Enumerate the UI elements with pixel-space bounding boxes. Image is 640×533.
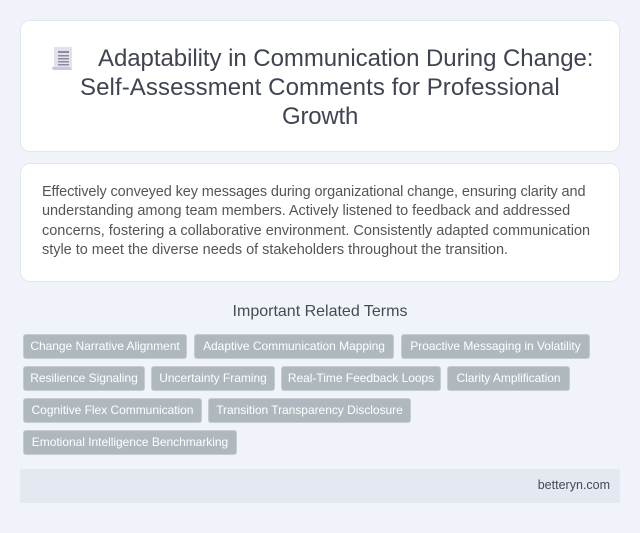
tag: Emotional Intelligence Benchmarking [32, 435, 228, 449]
tag [208, 398, 411, 423]
tag: Change Narrative Alignment [30, 339, 180, 353]
tag: Transition Transparency Disclosure [216, 403, 403, 417]
tag [23, 334, 187, 359]
text block: comment: concerns, fostering a collaborative environment. Consistently adapted communication [42, 223, 590, 239]
tag [23, 398, 202, 423]
tag [23, 430, 237, 455]
tag [447, 366, 570, 391]
title: Self-Assessment Comments for Professional [80, 74, 560, 101]
tag [23, 366, 145, 391]
footer text: betteryn.com [538, 478, 610, 492]
tag [281, 366, 441, 391]
tag: Proactive Messaging in Volatility [410, 339, 581, 353]
tag: Adaptive Communication Mapping [203, 339, 385, 353]
text block: comment: understanding among team members. Actively listened to feedback and addressed [42, 203, 570, 219]
tag: Uncertainty Framing [159, 371, 267, 385]
title: Adaptability in Communication During Change: [98, 45, 593, 72]
heading: related terms: Important Related Terms [233, 303, 407, 320]
tag: Real-Time Feedback Loops [288, 371, 434, 385]
tag [151, 366, 275, 391]
title: Growth [282, 103, 358, 130]
text block: comment: Effectively conveyed key messages during organizational change, ensuring clarity and [42, 184, 585, 200]
panel: title card [20, 20, 620, 152]
tag: Cognitive Flex Communication [32, 403, 193, 417]
tag [194, 334, 394, 359]
text block: comment: style to meet the diverse needs of stakeholders throughout the transition. [42, 242, 508, 258]
tag [401, 334, 590, 359]
text block: comment [42, 184, 590, 258]
title [80, 45, 593, 130]
icon: document [52, 47, 72, 70]
footer bar [20, 469, 620, 503]
tag: Clarity Amplification [456, 371, 561, 385]
panel: term tags [23, 334, 590, 455]
panel: self-assessment text [20, 163, 620, 282]
tag: Resilience Signaling [30, 371, 138, 385]
